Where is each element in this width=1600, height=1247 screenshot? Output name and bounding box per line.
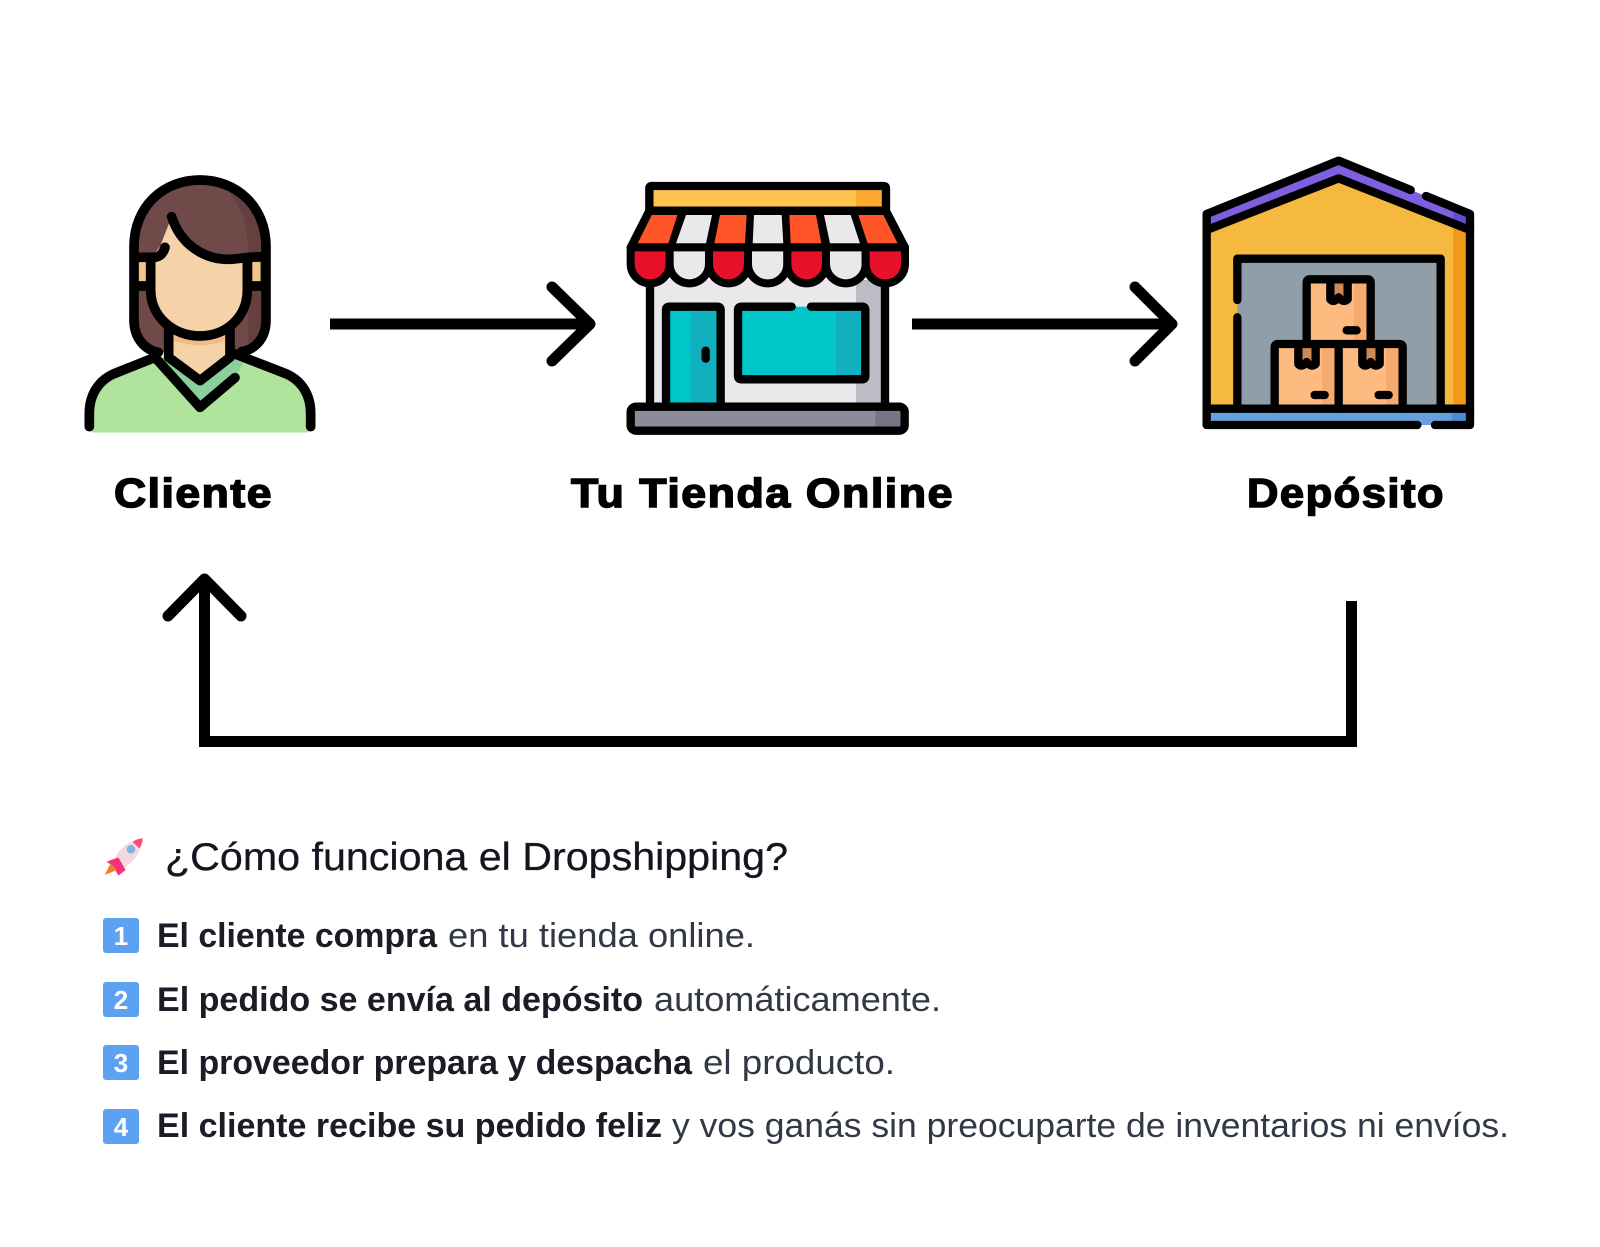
label: Tu Tienda Online: Tu Tienda Online bbox=[571, 470, 954, 516]
label: Depósito: Depósito bbox=[1247, 470, 1445, 516]
heading: ¿Cómo funciona el Dropshipping? bbox=[165, 836, 788, 879]
step 1: en tu tienda online. bbox=[448, 917, 755, 955]
step 3: El proveedor prepara y despacha bbox=[157, 1044, 693, 1082]
icon: number 3 badge bbox=[103, 1045, 139, 1080]
step 2: El pedido se envía al depósito bbox=[157, 981, 643, 1019]
icon: number 2 badge bbox=[103, 982, 139, 1017]
step 2 bbox=[103, 981, 941, 1019]
step 3 bbox=[103, 1044, 895, 1082]
arrow: cliente to tienda bbox=[330, 287, 590, 361]
step 4: El cliente recibe su pedido feliz bbox=[157, 1107, 662, 1145]
step 3: el producto. bbox=[703, 1044, 895, 1082]
icon: number 4 badge bbox=[103, 1109, 139, 1144]
step 1: El cliente compra bbox=[157, 917, 438, 955]
arrow: deposito back to cliente bbox=[168, 579, 1352, 742]
icon: client person bbox=[89, 180, 311, 433]
label: Cliente: Cliente bbox=[114, 470, 273, 516]
icon: number 2 badge: 2 bbox=[114, 985, 128, 1015]
icon: online store bbox=[631, 186, 905, 431]
step 2: automáticamente. bbox=[654, 981, 941, 1019]
icon: rocket bbox=[105, 838, 143, 876]
icon: number 1 badge: 1 bbox=[114, 921, 128, 951]
icon: number 4 badge: 4 bbox=[114, 1112, 129, 1142]
step 1 bbox=[103, 917, 755, 955]
step 4: y vos ganás sin preocuparte de inventarios ni envíos. bbox=[672, 1107, 1509, 1145]
icon: number 3 badge: 3 bbox=[114, 1048, 128, 1078]
step 4 bbox=[103, 1107, 1509, 1145]
icon: warehouse bbox=[1207, 161, 1470, 425]
arrow: tienda to deposito bbox=[912, 287, 1172, 361]
icon: number 1 badge bbox=[103, 918, 139, 953]
